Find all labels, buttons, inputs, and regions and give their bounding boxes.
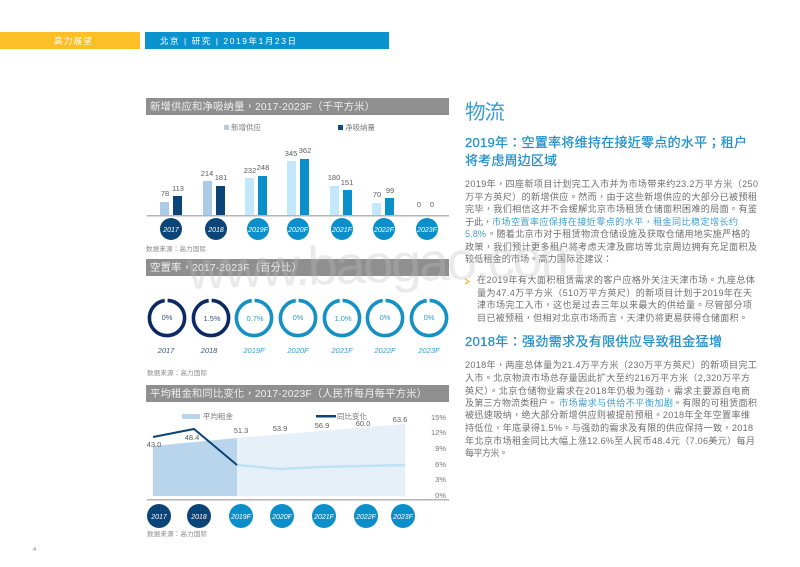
bar chart: 151 — [341, 178, 353, 187]
text block: 2019 outlook: 政策，我们预计更多租户将考虑天津及廊坊等北京周边拥有充足面积及 — [465, 241, 757, 252]
donut charts — [149, 300, 447, 336]
donut values: 0% — [162, 313, 173, 322]
heading: 2018 review: 2018年：强劲需求及有限供应导致租金猛增 — [465, 334, 722, 349]
bullet: Tianjin recommendation: 在2019年有大面积租赁需求的客户应格外关注天津市场。九座总体 — [477, 274, 755, 285]
percentage axis: 9% — [435, 444, 446, 453]
year badges: chart 1: 2023F — [416, 227, 438, 234]
heading: chart 2: 空置率，2017-2023F（百分比） — [150, 261, 302, 274]
bar chart: 362 — [299, 146, 311, 155]
percentage axis — [431, 413, 446, 500]
year badges: chart 3: 2023F — [392, 514, 414, 521]
bar chart: 113 — [172, 184, 184, 193]
percentage axis: 6% — [435, 460, 446, 469]
text block: 2019 outlook — [465, 178, 758, 264]
year badges: chart 3: 2021F — [313, 514, 335, 521]
text block: 2019 outlook: 市场空置率应保持在接近零点的水平，租金同比稳定增长约 — [492, 216, 738, 227]
year labels: chart 2: 2018 — [200, 346, 218, 355]
bar chart: 0 — [430, 200, 434, 209]
donut values: 0% — [380, 313, 391, 322]
top bar: location and date: 北京 | 研究 | 2019年1月23日 — [160, 36, 296, 46]
legend: chart 1: 新增供应 — [231, 122, 262, 132]
year labels: chart 2: 2017 — [157, 346, 175, 355]
percentage axis: 15% — [431, 413, 446, 422]
percentage axis: 3% — [435, 475, 446, 484]
year badges: chart 1: 2019F — [247, 227, 269, 234]
area and line chart: 53.9 — [273, 424, 287, 433]
heading: chart 1: 新增供应和净吸纳量，2017-2023F（千平方米） — [150, 100, 375, 113]
panel: new supply and net absorption chart — [146, 98, 449, 253]
top bar: section tag: 高力展望 — [54, 36, 92, 46]
percentage axis: 0% — [435, 491, 446, 500]
percentage axis: 12% — [431, 428, 446, 437]
legend: chart 1 — [224, 122, 376, 132]
bar chart: 214 — [201, 169, 213, 178]
bar chart: 70 — [373, 190, 381, 199]
donut values: 1.5% — [203, 314, 221, 323]
top bar: location and date — [145, 32, 389, 49]
text block: 2018 review: 及第三方物流类租户。 — [465, 397, 557, 408]
year badges: chart 1: 2017 — [162, 227, 180, 234]
year labels: chart 2: 2023F — [417, 346, 440, 355]
year badges: chart 3: 2019F — [230, 514, 252, 521]
text block: 2019 outlook: 5.8% — [465, 229, 486, 239]
bar chart: 99 — [386, 186, 394, 195]
heading: chart 3 — [146, 385, 449, 402]
source note: chart 3: 数据来源：高力国际 — [147, 529, 208, 538]
year badges: chart 1: 2020F — [287, 227, 309, 234]
year badges: chart 3 — [147, 504, 415, 528]
text block: 2018 review: 2018年，两座总体量为21.4万平方米（230万平方英尺）的新项目完工 — [465, 359, 757, 370]
legend: chart 3 — [182, 411, 368, 421]
bar chart: 248 — [257, 163, 269, 172]
panel: vacancy rate chart — [146, 259, 449, 377]
area and line chart — [147, 415, 449, 500]
bullet: Tianjin recommendation: 津市场完工入市，这也是过去三年以来最大的供给量。尽管部分项 — [477, 299, 752, 310]
text block: 2019 outlook: 2019年，四座新项目计划完工入市并为市场带来约23.2万平方米（250 — [465, 178, 758, 189]
source note: chart 1: 数据来源：高力国际 — [146, 244, 206, 253]
area and line chart: 48.4 — [185, 433, 199, 442]
bar chart — [147, 146, 449, 216]
top bar: section tag — [0, 32, 140, 49]
heading: chart 1 — [146, 98, 449, 115]
text block: 2018 review: 被迅速吸纳，绝大部分新增供应则被提前预租。2018年全年空置率维 — [465, 409, 750, 420]
year labels: chart 2: 2021F — [330, 346, 353, 355]
area and line chart: 63.6 — [393, 415, 407, 424]
text block: 2018 review: 每平方米。 — [465, 447, 508, 458]
year labels: chart 2: 2019F — [242, 346, 265, 355]
text block: 2019 outlook: 较低租金的市场。高力国际还建议： — [465, 253, 612, 264]
area and line chart: 51.3 — [234, 426, 248, 435]
text block: 2018 review: 英尺）。北京仓储物业需求在2018年仍极为强劲，需求主要源自电商 — [465, 385, 750, 396]
source note: chart 2: 数据来源：高力国际 — [147, 368, 208, 377]
text block: 2019 outlook: 完毕，我们相信这并不会缓解北京市场租赁仓储面积困难的局面。有鉴 — [465, 203, 757, 214]
heading: 2019 outlook: 2019年：空置率将维持在接近零点的水平；租户 — [465, 135, 747, 150]
text block: 2018 review — [465, 359, 757, 458]
bullet: Tianjin recommendation: 量为47.4万平方米（510万平方英尺）的新项目计划于2019年在天 — [477, 287, 752, 298]
year badges: chart 3: 2022F — [355, 514, 377, 521]
panel: average rent chart — [146, 385, 449, 538]
year badges: chart 1: 2021F — [331, 227, 353, 234]
year badges: chart 3: 2018 — [190, 514, 207, 521]
area and line chart: 43.0 — [147, 440, 161, 449]
heading: 2019 outlook: 将考虑周边区域 — [465, 153, 557, 168]
donut values: 0% — [293, 313, 304, 322]
text block: 2019 outlook: 。随着北京市对于租赁物流仓储设施及获取仓储用地实施严格的 — [487, 228, 750, 239]
heading: chart 2 — [146, 259, 449, 276]
year labels: chart 2 — [157, 346, 440, 355]
bar chart: 78 — [161, 189, 169, 198]
area and line chart: 56.9 — [315, 421, 329, 430]
title: logistics: 物流 — [465, 101, 505, 124]
bar chart: 345 — [285, 149, 297, 158]
text block: 2018 review: 。有限的可租赁面积 — [673, 397, 757, 408]
heading: 2019 outlook — [465, 135, 747, 168]
watermark: www.baogao.com — [185, 227, 586, 301]
year badges: chart 3: 2017 — [150, 514, 168, 521]
bar chart: 181 — [215, 173, 227, 182]
legend: chart 3: 平均租金 — [203, 411, 234, 421]
text block: 2019 outlook: 于此， — [465, 216, 492, 227]
year badges: chart 1 — [160, 218, 438, 240]
year labels: chart 2: 2020F — [286, 346, 309, 355]
page number: 4 — [33, 547, 36, 553]
text block: 2018 review: 市场需求与供给不平衡加剧 — [559, 397, 673, 408]
bar chart: 232 — [244, 166, 256, 175]
donut values — [162, 313, 435, 323]
donut values: 0.7% — [246, 314, 264, 323]
text block: 2018 review: 持低位，年底录得1.5%。与强劲的需求及有限的供应保持一致，2018 — [465, 422, 753, 433]
legend: chart 1: 净吸纳量 — [345, 122, 376, 132]
bar chart: 0 — [417, 200, 421, 209]
donut values: 1.0% — [334, 314, 352, 323]
bullet: Tianjin recommendation — [465, 274, 755, 323]
donut values: 0% — [424, 313, 435, 322]
legend: chart 3: 同比变化 — [337, 411, 368, 421]
year badges: chart 1: 2018 — [207, 227, 224, 234]
bullet: Tianjin recommendation: 目已被预租，但相对北京市场而言，天津仍将更易获得仓储面积。 — [477, 312, 748, 323]
area and line chart: 60.0 — [356, 419, 370, 428]
text block: 2018 review: 入市。北京物流市场总存量因此扩大至约216万平方米（2,320万平方 — [465, 372, 750, 383]
year labels: chart 2: 2022F — [373, 346, 396, 355]
heading: chart 3: 平均租金和同比变化，2017-2023F（人民币每月每平方米） — [150, 387, 427, 400]
bar chart: 180 — [328, 173, 340, 182]
year badges: chart 1: 2022F — [373, 227, 395, 234]
text block: 2019 outlook: 万平方英尺）的新增供应。然而，由于这些新增供应的大部分已被预租 — [465, 191, 757, 202]
text block: 2018 review: 年北京市场租金同比大幅上涨12.6%至人民币48.4元（7.06美元）每月 — [465, 435, 755, 446]
year badges: chart 3: 2020F — [271, 514, 293, 521]
